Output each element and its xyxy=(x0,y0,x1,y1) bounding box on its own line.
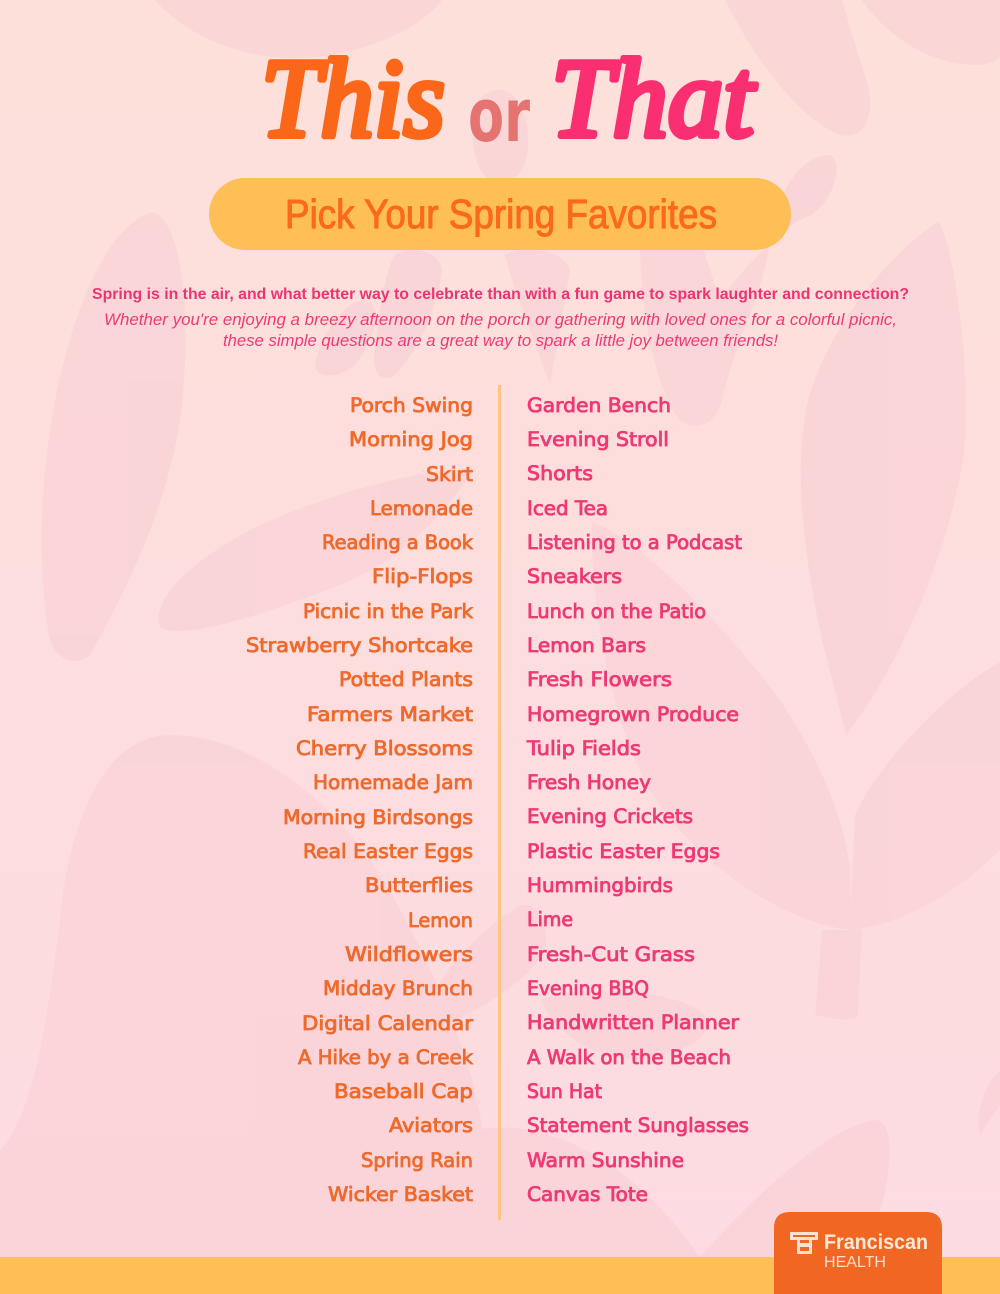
title word: That: That xyxy=(551,37,757,161)
right column: that options: Tulip Fields xyxy=(526,737,641,760)
right column: that options: Fresh Flowers xyxy=(527,668,672,691)
left column: this options: Reading a Book xyxy=(322,531,474,554)
left column: this options: Cherry Blossoms xyxy=(296,737,473,760)
left column: this options: Real Easter Eggs xyxy=(303,840,473,863)
logo badge xyxy=(774,1212,942,1294)
right column: that options: Sneakers xyxy=(527,565,622,588)
left column: this options: Lemon xyxy=(408,909,473,932)
left column: this options: Butterflies xyxy=(365,874,473,897)
right column: that options: Lime xyxy=(527,908,573,931)
subtitle banner xyxy=(209,178,791,250)
left column: this options: Midday Brunch xyxy=(323,977,473,1000)
logo subtext: HEALTH xyxy=(824,1254,886,1271)
right column: that options: Fresh-Cut Grass xyxy=(527,943,695,966)
right column: that options: Canvas Tote xyxy=(527,1183,648,1206)
right column: that options: Fresh Honey xyxy=(527,771,651,794)
left column: this options: Potted Plants xyxy=(339,668,473,691)
left column: this options: Morning Jog xyxy=(349,428,473,451)
right column: that options: Evening BBQ xyxy=(527,977,649,1000)
right column: that options xyxy=(526,394,749,1206)
footer band xyxy=(0,1257,1000,1294)
right column: that options: Evening Crickets xyxy=(527,805,693,828)
right column: that options: Evening Stroll xyxy=(527,428,669,451)
subtitle text: Pick Your Spring Favorites xyxy=(285,191,717,237)
left column: this options: Baseball Cap xyxy=(334,1080,473,1103)
right column: that options: A Walk on the Beach xyxy=(527,1046,731,1069)
icon: franciscan cross xyxy=(790,1232,818,1254)
left column: this options: Picnic in the Park xyxy=(303,600,474,623)
left column: this options: Flip-Flops xyxy=(372,565,473,588)
right column: that options: Hummingbirds xyxy=(527,874,673,897)
left column: this options: Homemade Jam xyxy=(313,771,473,794)
right column: that options: Shorts xyxy=(527,462,593,485)
left column: this options: Lemonade xyxy=(370,497,473,520)
left column: this options: Aviators xyxy=(389,1114,473,1137)
intro bold line: Spring is in the air, and what better way to celebrate than with a fun game to spark laughter and connection? xyxy=(92,286,909,303)
right column: that options: Handwritten Planner xyxy=(527,1011,740,1034)
right column: that options: Homegrown Produce xyxy=(527,703,739,726)
left column: this options: Wicker Basket xyxy=(328,1183,473,1206)
right column: that options: Listening to a Podcast xyxy=(527,531,742,554)
left column: this options: Wildflowers xyxy=(345,943,473,966)
center divider xyxy=(498,385,501,1220)
right column: that options: Lunch on the Patio xyxy=(527,600,706,623)
right column: that options: Warm Sunshine xyxy=(527,1149,684,1172)
intro italic lines: Whether you're enjoying a breezy afternoon on the porch or gathering with loved ones for a colorful picnic, xyxy=(104,311,897,329)
left column: this options: Spring Rain xyxy=(361,1149,473,1172)
intro italic lines xyxy=(104,311,897,350)
left column: this options: Morning Birdsongs xyxy=(283,806,473,829)
left column: this options: Strawberry Shortcake xyxy=(246,634,473,657)
right column: that options: Plastic Easter Eggs xyxy=(527,840,720,863)
title word: or: or xyxy=(468,73,530,159)
left column: this options xyxy=(246,394,474,1206)
left column: this options: Farmers Market xyxy=(307,703,473,726)
right column: that options: Sun Hat xyxy=(527,1080,602,1103)
right column: that options: Lemon Bars xyxy=(527,634,646,657)
intro text xyxy=(92,286,909,350)
right column: that options: Garden Bench xyxy=(527,394,671,417)
left column: this options: Digital Calendar xyxy=(302,1012,474,1035)
left column: this options: Skirt xyxy=(426,463,473,486)
intro italic lines: these simple questions are a great way to spark a little joy between friends! xyxy=(223,332,778,350)
left column: this options: Porch Swing xyxy=(350,394,473,417)
logo wordmark: Franciscan xyxy=(824,1231,928,1254)
right column: that options: Statement Sunglasses xyxy=(527,1114,749,1137)
title word: This: This xyxy=(261,37,445,161)
right column: that options: Iced Tea xyxy=(527,497,608,520)
left column: this options: A Hike by a Creek xyxy=(298,1046,474,1069)
title xyxy=(261,37,757,161)
